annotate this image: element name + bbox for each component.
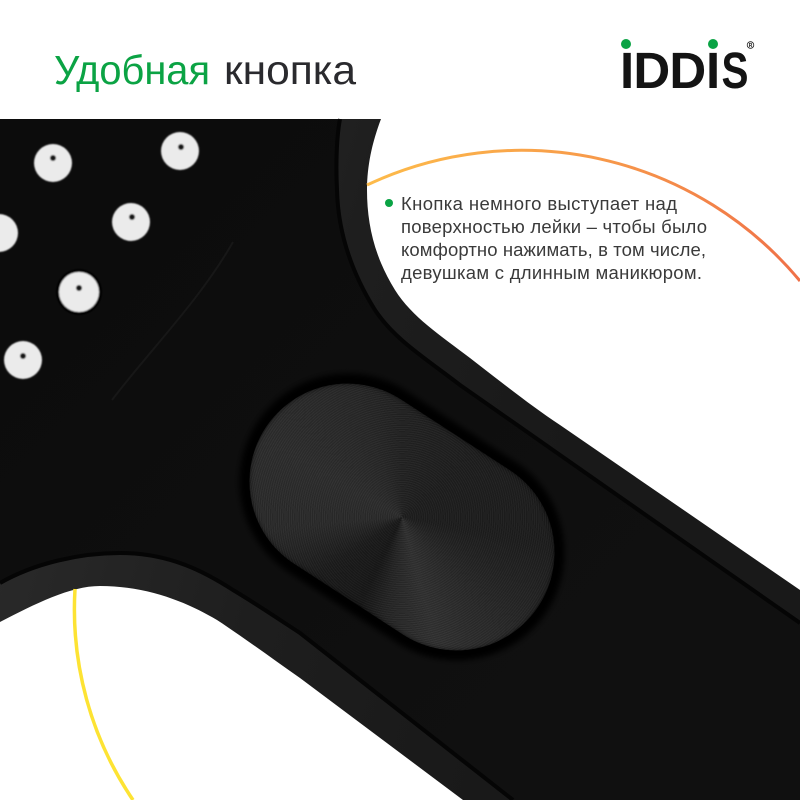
metal button [212, 346, 592, 688]
logo: IDDIS: S [722, 42, 748, 99]
nozzles [0, 132, 199, 379]
logo: IDDIS: D [669, 42, 706, 99]
yellow arc [74, 589, 133, 800]
title: Удобная [54, 47, 210, 93]
caption text: девушкам с длинным маникюром. [401, 262, 702, 283]
button recess [198, 332, 606, 702]
bullet dot [385, 199, 393, 207]
logo: IDDIS [620, 39, 754, 99]
logo: IDDIS: D [633, 42, 670, 99]
title [54, 47, 356, 93]
title: кнопка [224, 47, 356, 93]
caption text: поверхностью лейки – чтобы было [401, 216, 707, 237]
caption text: Кнопка немного выступает над [401, 193, 677, 214]
faint contour on face [112, 242, 233, 400]
logo: IDDIS: I [706, 42, 720, 99]
logo: IDDIS: R [749, 43, 753, 49]
logo: IDDIS: I [620, 42, 634, 99]
caption text [401, 193, 707, 283]
caption text: комфортно нажимать, в том числе, [401, 239, 706, 260]
orange arc [367, 150, 800, 281]
